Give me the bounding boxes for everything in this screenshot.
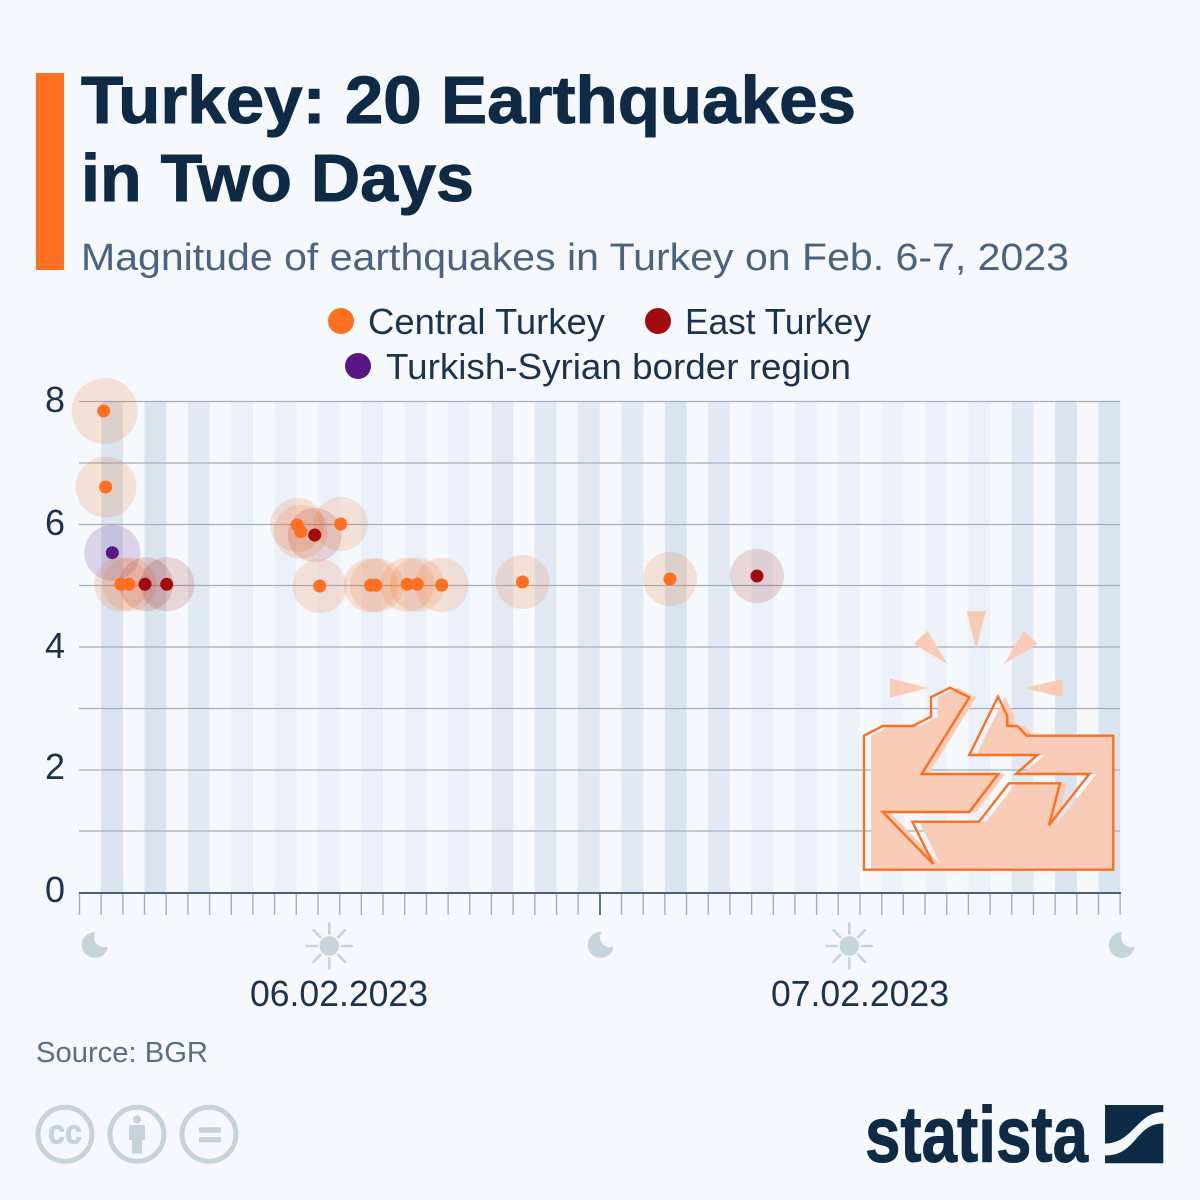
icon: earthquake crack illustration: [864, 611, 1114, 870]
quake 2 Central Turkey magnitude 6.6: [76, 456, 136, 518]
quake group: second cluster at magnitude 5: [293, 558, 469, 613]
legend: [328, 301, 871, 387]
statista logo icon: [1105, 1105, 1163, 1163]
icon: no derivatives: [182, 1107, 236, 1161]
legend: East Turkey: East Turkey: [685, 301, 871, 342]
chart: y axis labels: 2: [45, 746, 65, 787]
quake group: first cluster at magnitude 5: [94, 557, 194, 611]
legend: Central Turkey: Central Turkey: [368, 301, 605, 342]
quake 19 Central Turkey: [643, 552, 697, 606]
statista wordmark: statista: [865, 1090, 1089, 1178]
date labels: [250, 973, 949, 1014]
icon: attribution: [110, 1107, 164, 1161]
quake 20 East Turkey: [730, 549, 784, 603]
source: Source: BGR: [36, 1037, 208, 1069]
icon: moon right: [1109, 932, 1135, 958]
chart: y axis labels: 8: [45, 379, 65, 420]
icon: creative commons: cc: [48, 1114, 82, 1152]
quake 3 border region magnitude 5.5: [84, 525, 140, 581]
date labels: 07.02.2023: [771, 973, 949, 1014]
quake 18 Central Turkey: [496, 555, 550, 609]
icon: moon middle: [588, 932, 614, 958]
chart: x axis line and ticks: [79, 893, 1121, 915]
legend: Turkish-Syrian border region: Turkish-Syrian border region: [386, 346, 851, 387]
chart: y axis labels: 0: [45, 869, 65, 910]
date labels: 06.02.2023: [250, 973, 428, 1014]
icon: moon left: [82, 932, 108, 958]
chart: night and day hour strips: [101, 401, 1120, 892]
title: Turkey: 20 Earthquakes: [81, 63, 856, 138]
chart: earthquake bubbles: [72, 378, 784, 613]
chart: y axis labels: [45, 379, 65, 910]
quake group: cluster at magnitude 6: [270, 497, 368, 562]
subtitle: Magnitude of earthquakes in Turkey on Feb. 6-7, 2023: [81, 237, 1069, 279]
title accent bar: [36, 73, 64, 270]
icon: creative commons: [38, 1107, 92, 1161]
chart: y axis labels: 6: [45, 502, 65, 543]
title: [81, 63, 856, 216]
title: in Two Days: [81, 141, 474, 216]
icon: sun 06.02: [307, 924, 352, 968]
quake 1 Central Turkey magnitude 7.8: [72, 378, 138, 444]
icon: sun 07.02: [827, 924, 872, 968]
chart: y axis labels: 4: [45, 625, 65, 666]
